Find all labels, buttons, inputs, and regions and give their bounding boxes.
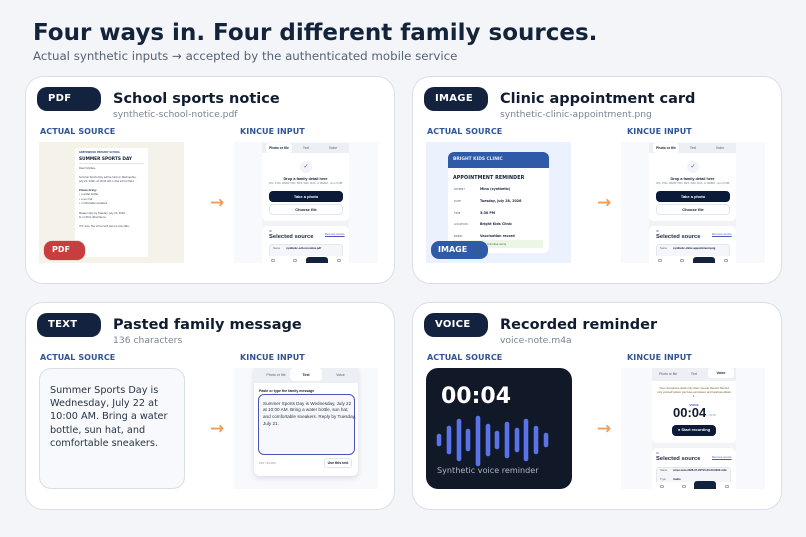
phone screen: Selected source	[656, 456, 700, 462]
appointment card: APPOINTMENT REMINDER	[453, 176, 524, 181]
phone screen: synthetic-school-notice.pdf	[286, 247, 321, 250]
phone screen: ID	[656, 229, 659, 233]
notice paper	[75, 148, 148, 257]
phone text input form	[254, 368, 358, 476]
arrow: →	[597, 419, 611, 439]
phone screen: Photo or file	[656, 146, 676, 150]
message text: bottle, sun hat, and	[50, 425, 145, 436]
image file name: synthetic-clinic-appointment.png	[500, 109, 652, 120]
waveform caption: Synthetic voice reminder	[437, 465, 539, 475]
phone screen: Voice	[717, 371, 725, 375]
phone text input form: Paste or type the family message	[259, 389, 314, 393]
phone screen: only yourself unless you have permission and local law allows	[657, 391, 731, 394]
phone screen: Choose file	[295, 207, 317, 212]
appointment card: DATE	[454, 199, 461, 203]
phone screen: ✓	[303, 164, 309, 170]
phone screen: Text	[691, 372, 697, 376]
phone screen: Take a photo	[681, 194, 705, 199]
appointment card	[448, 152, 549, 253]
actual source label: ACTUAL SOURCE	[427, 127, 502, 136]
phone screen: JPG, PNG, WEBP, PDF, MP3, WAV, M4A, or WEBM · up to 8 MB	[656, 182, 729, 185]
message text: comfortable sneakers.	[50, 438, 158, 449]
phone screen: Drop a family detail here	[670, 177, 715, 181]
IMAGE badge: IMAGE	[438, 245, 467, 254]
VOICE format pill: VOICE	[435, 319, 470, 330]
KinCue input label: KINCUE INPUT	[240, 127, 305, 136]
PDF file name: synthetic-school-notice.pdf	[113, 109, 238, 120]
appointment card: BRIGHT KIDS CLINIC	[453, 157, 503, 162]
message text: 10:00 AM. Bring a water	[50, 411, 167, 422]
panel: image source	[412, 76, 782, 284]
phone screen: JPG, PNG, WEBP, PDF, MP3, WAV, M4A, or WEBM · up to 8 MB	[269, 182, 342, 185]
notice paper: • a water bottle	[79, 193, 98, 196]
pasted message preview	[39, 368, 185, 489]
appointment card: minutes early	[487, 242, 506, 246]
notice paper: July 22, 2026, at 10:00 AM on the school field.	[79, 180, 134, 183]
KinCue input screenshot	[621, 142, 765, 263]
actual source label: ACTUAL SOURCE	[427, 353, 502, 362]
TEXT format pill: TEXT	[48, 319, 77, 330]
phone screen: ● Start recording	[678, 427, 710, 432]
notice paper: Dear families,	[79, 167, 96, 170]
title: Four ways in. Four different family sources.	[33, 20, 597, 46]
appointment card: PATIENT	[454, 187, 465, 191]
KinCue input label: KINCUE INPUT	[627, 353, 692, 362]
KinCue input label: KINCUE INPUT	[240, 353, 305, 362]
arrow: →	[210, 193, 224, 213]
phone screen: Type	[660, 478, 666, 481]
notice paper: SUMMER SPORTS DAY	[79, 157, 132, 162]
phone screen: Voice	[329, 146, 337, 150]
message text	[50, 384, 168, 449]
KinCue input label: KINCUE INPUT	[627, 127, 692, 136]
phone screen: Voice	[716, 146, 724, 150]
appointment card: BRING	[454, 234, 463, 238]
phone screen: / 02:00	[708, 414, 716, 417]
notice paper: • comfortable sneakers	[79, 202, 107, 205]
appointment card: 3:30 PM	[480, 211, 495, 215]
clinic appointment card preview	[426, 142, 571, 263]
KinCue input screenshot	[234, 142, 378, 263]
phone screen: Selected source	[269, 234, 313, 240]
voice file name: voice-note.m4a	[500, 335, 572, 346]
phone text input form: Text	[302, 373, 310, 377]
appointment card: Bright Kids Clinic	[480, 222, 512, 226]
actual source label: ACTUAL SOURCE	[40, 353, 115, 362]
phone screen: Remove source	[712, 455, 732, 459]
PDF card heading: School sports notice	[113, 91, 280, 107]
phone text input form: Photo or file	[266, 373, 286, 377]
KinCue input screenshot	[621, 368, 765, 489]
phone screen: Take a photo	[294, 194, 318, 199]
IMAGE badge	[431, 241, 488, 259]
voice card heading: Recorded reminder	[500, 317, 657, 333]
phone text input form: at 10:00 AM. Bring a water bottle, sun hat,	[263, 407, 349, 412]
PDF badge	[44, 241, 85, 260]
TEXT format pill	[37, 313, 101, 337]
phone text input form: Summer Sports Day is Wednesday, July 22	[263, 401, 351, 406]
phone screen: it.	[693, 395, 695, 398]
phone screen: Name	[273, 247, 280, 250]
phone screen: Remove source	[325, 232, 345, 236]
phone screen: Choose file	[682, 207, 704, 212]
appointment card: TIME	[454, 211, 460, 215]
panel: PDF source	[25, 76, 395, 284]
appointment card: Mina (synthetic)	[480, 187, 510, 191]
phone screen: Remove source	[712, 232, 732, 236]
phone screen: Your microphone starts only when you tap Record. Record	[659, 387, 729, 390]
phone text input form: Voice	[336, 373, 345, 377]
phone text input form: July 21.	[263, 421, 279, 426]
panel: text source	[25, 302, 395, 510]
voice recording preview	[426, 368, 572, 489]
subtitle: Actual synthetic inputs → accepted by the authenticated mobile service	[33, 49, 457, 63]
phone screen: Text	[690, 146, 696, 150]
PDF badge: PDF	[52, 245, 70, 254]
phone screen	[652, 368, 736, 489]
notice paper: to confirm attendance.	[79, 216, 106, 219]
panel: voice source	[412, 302, 782, 510]
notice paper: Summer Sports Day will be held on Wednesday,	[79, 176, 137, 179]
phone text input form: Use this text	[328, 461, 348, 465]
VOICE format pill	[424, 313, 488, 337]
phone screen: Name	[660, 247, 667, 250]
phone screen: Selected source	[656, 234, 700, 240]
PDF format pill: PDF	[48, 93, 71, 104]
phone screen: Text	[303, 146, 309, 150]
phone screen	[262, 143, 349, 263]
phone screen: synthetic-clinic-appointment.png	[673, 247, 715, 250]
appointment card: Vaccination record	[480, 234, 515, 238]
phone text input form: and comfortable sneakers. Reply by Tuesday,	[263, 414, 356, 419]
notice paper: GREENWOOD PRIMARY SCHOOL	[79, 151, 120, 154]
message text: Summer Sports Day is	[50, 384, 158, 396]
image card heading: Clinic appointment card	[500, 91, 695, 107]
school notice document preview	[39, 142, 184, 263]
message text: Wednesday, July 22 at	[50, 398, 158, 409]
phone screen: Drop a family detail here	[283, 177, 328, 181]
appointment card: Tuesday, July 28, 2026	[480, 199, 521, 203]
phone screen: VOICE	[689, 403, 699, 407]
notice paper: • a sun hat	[79, 198, 92, 201]
phone text input form: 136 / 50,000	[259, 461, 276, 465]
IMAGE format pill: IMAGE	[435, 93, 473, 104]
phone screen: 00:04	[673, 405, 706, 420]
notice paper: If it rains, the school will send a new date.	[79, 225, 129, 228]
phone screen: Name	[660, 469, 667, 472]
phone screen: ID	[269, 229, 272, 233]
phone screen: Photo or file	[269, 146, 289, 150]
phone screen: Photo or file	[659, 372, 677, 376]
phone screen: voice-note-2026-07-20T15-00-00.000Z.m4a	[673, 469, 726, 472]
actual source label: ACTUAL SOURCE	[40, 127, 115, 136]
KinCue input screenshot	[234, 368, 378, 489]
arrow: →	[597, 193, 611, 213]
phone screen: ✓	[690, 164, 696, 170]
phone screen	[649, 143, 736, 263]
notice paper: Please bring:	[79, 189, 97, 192]
phone screen: Audio	[673, 478, 681, 481]
IMAGE format pill	[424, 87, 488, 111]
text card heading: Pasted family message	[113, 317, 302, 333]
appointment card: LOCATION	[454, 222, 468, 226]
recording timer: 00:04	[441, 384, 511, 409]
PDF format pill	[37, 87, 101, 111]
arrow: →	[210, 419, 224, 439]
notice paper: Please reply by Tuesday, July 21, 2026,	[79, 212, 126, 215]
phone screen: ID	[656, 451, 659, 455]
waveform	[436, 416, 548, 466]
character count: 136 characters	[113, 335, 182, 346]
